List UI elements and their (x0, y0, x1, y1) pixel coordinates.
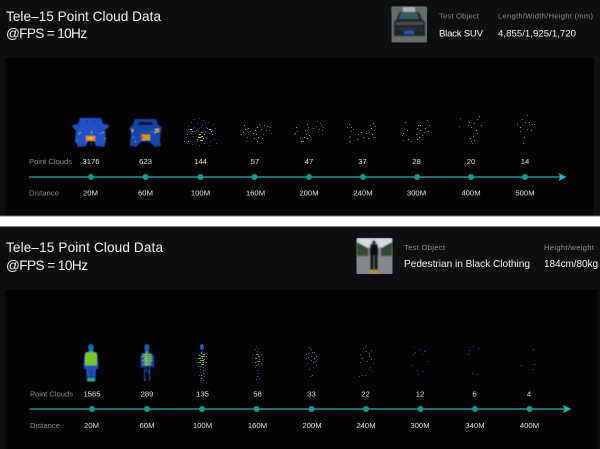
point cloud: car at 500M (518, 116, 534, 144)
test object info: SUV: 4,855/1,925/1,720 (498, 28, 576, 40)
row: distances: Distance (30, 421, 60, 430)
row: point cloud counts (29, 157, 530, 166)
point cloud: car at 100M (184, 118, 216, 146)
row: point cloud counts (30, 390, 532, 398)
row: point cloud counts: 33 (307, 390, 316, 398)
row: point cloud counts: 47 (305, 157, 313, 166)
row: distances: 200M (302, 421, 322, 430)
row: distances: Distance (29, 188, 59, 198)
row: point cloud counts: 58 (253, 390, 262, 398)
row: distances (29, 188, 535, 198)
row: point cloud counts: 28 (412, 157, 421, 166)
test object info: pedestrian: Pedestrian in Black Clothing (404, 259, 530, 270)
point cloud: person at 240M (360, 346, 374, 376)
row: point cloud counts: Point Clouds (30, 390, 73, 398)
row: point cloud counts: 20 (467, 157, 475, 166)
row: point cloud counts: 289 (141, 390, 153, 398)
row: distances: 400M (520, 421, 539, 430)
row: distances: 60M (140, 421, 154, 430)
test object info: pedestrian (404, 243, 598, 270)
row: point cloud counts: 37 (358, 157, 367, 166)
row: distances: 160M (246, 188, 265, 198)
point cloud: car at 60M (129, 119, 162, 147)
point cloud: person at 100M (196, 344, 208, 380)
row: distances: 200M (299, 188, 319, 198)
title: pedestrian panel: Tele–15 Point Cloud Data (6, 240, 163, 255)
row: point cloud counts: 4 (527, 390, 532, 398)
point cloud: person at 300M (412, 348, 428, 374)
test object info: SUV: Test Object (439, 12, 480, 20)
title: pedestrian panel: @FPS = 10Hz (6, 258, 88, 273)
title: SUV panel (6, 9, 161, 41)
test object info: pedestrian: 184cm/80kg (544, 259, 598, 270)
row: point cloud counts: 14 (521, 157, 530, 166)
row: distances (30, 421, 539, 430)
row: point cloud counts: 22 (361, 390, 370, 398)
row: distances: 20M (84, 421, 99, 430)
panel: black SUV (0, 0, 600, 216)
row: distances: 340M (465, 421, 485, 430)
row: distances: 300M (410, 421, 430, 430)
title: SUV panel: Tele–15 Point Cloud Data (6, 9, 161, 24)
row: distances: 500M (515, 188, 535, 198)
point cloud: car at 20M (72, 118, 109, 147)
row: distances: 100M (193, 421, 212, 430)
point cloud: person at 340M (468, 346, 478, 374)
point cloud: person at 20M (84, 344, 98, 382)
point cloud: car at 240M (348, 124, 376, 142)
point cloud: person at 160M (252, 346, 262, 380)
arrow: distance axis (29, 173, 566, 181)
photo: pedestrian (356, 238, 392, 274)
row: point cloud counts: 57 (251, 157, 259, 166)
row: distances: 400M (461, 188, 481, 198)
point cloud: car at 400M (460, 116, 482, 144)
test object info: pedestrian: Height/weight (544, 243, 595, 252)
point cloud: person at 200M (306, 348, 316, 376)
point cloud: car at 160M (240, 124, 272, 142)
row: point cloud counts: 144 (194, 157, 208, 166)
test object info: pedestrian: Test Object (404, 243, 446, 252)
test object info: SUV: Black SUV (439, 28, 484, 40)
row: distances: 20M (83, 188, 98, 198)
row: distances: 240M (353, 188, 373, 198)
row: distances: 300M (407, 188, 426, 198)
panel: pedestrian (0, 226, 600, 449)
row: point cloud counts: 6 (472, 390, 477, 398)
title: SUV panel: @FPS = 10Hz (6, 26, 87, 41)
point cloud: car at 300M (402, 120, 430, 142)
test object info: SUV: Length/Width/Height (mm) (498, 12, 593, 20)
arrow: distance axis (30, 405, 572, 413)
point cloud: person at 60M (140, 344, 154, 380)
row: point cloud counts: 623 (139, 157, 152, 166)
row: distances: 160M (248, 421, 267, 430)
row: point cloud counts: 3176 (82, 157, 100, 166)
row: distances: 240M (356, 421, 376, 430)
row: distances: 100M (191, 188, 210, 198)
point cloud: car at 200M (294, 122, 324, 142)
row: point cloud counts: 1565 (83, 390, 101, 398)
row: point cloud counts: 12 (416, 390, 424, 398)
title: pedestrian panel (6, 240, 163, 273)
row: point cloud counts: 135 (196, 390, 209, 398)
photo: black SUV (392, 6, 427, 42)
row: point cloud counts: Point Clouds (29, 157, 72, 166)
row: distances: 60M (138, 188, 153, 198)
point cloud: person at 400M (522, 350, 534, 370)
test object info: SUV (439, 12, 593, 40)
